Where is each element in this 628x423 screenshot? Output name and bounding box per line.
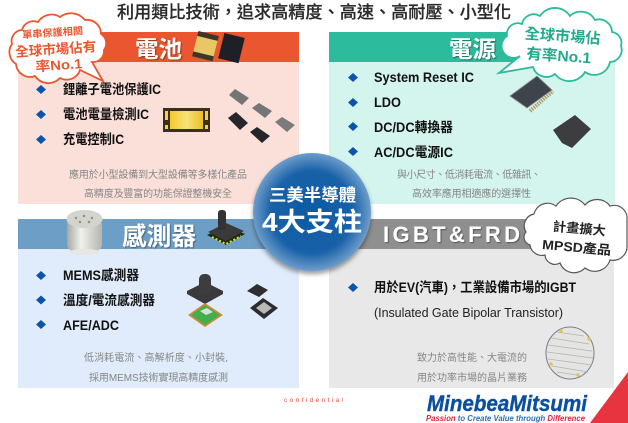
battery description	[69, 168, 247, 200]
callout text	[523, 25, 601, 68]
icon: yellow battery chip	[163, 108, 210, 132]
badge line 2: 4大支柱	[262, 207, 362, 237]
icon: pressure sensor exploded view	[187, 274, 223, 327]
sensor heading: 感測器	[122, 222, 196, 251]
battery header band	[18, 32, 299, 62]
callout text: 計畫擴大	[552, 219, 606, 238]
icon: SOP chip	[510, 76, 553, 111]
cloud shape	[499, 8, 622, 81]
battery bullet list: 充電控制IC	[63, 131, 124, 147]
IGBT description: 用於功率市場的晶片業務	[417, 371, 527, 384]
sensor bullet list: 溫度/電流感測器	[63, 292, 155, 308]
IGBT full name: (Insulated Gate Bipolar Transistor)	[374, 306, 563, 320]
logo wordmark: MinebeaMitsumi	[427, 391, 588, 416]
power bullet list: LDO	[374, 95, 401, 110]
battery description: 應用於小型設備到大型設備等多樣化產品	[69, 168, 247, 181]
logo tagline: Passion to Create Value through Difference	[426, 414, 586, 423]
icon: QFN chip	[553, 115, 591, 148]
battery bullet list	[36, 81, 161, 147]
callout text: 全球市場佔有	[15, 38, 97, 60]
IGBT bullet item: 用於EV(汽車)，工業設備市場的IGBT	[374, 279, 577, 295]
sensor header band	[18, 219, 299, 249]
power description	[397, 168, 541, 200]
icon: QFN sensor chip	[247, 284, 278, 319]
panel: IGBT and FRD	[329, 219, 614, 388]
icon: small package chips	[228, 89, 295, 143]
sensor description	[84, 351, 228, 384]
callout text: 全球市場佔	[524, 25, 601, 48]
power bullet list: AC/DC電源IC	[374, 145, 453, 160]
sensor panel body	[18, 219, 299, 388]
IGBT panel body	[329, 219, 614, 388]
cloud shape	[524, 198, 627, 273]
callout text: MPSD產品	[542, 237, 612, 258]
callout text: 有率No.1	[526, 45, 592, 67]
callout: power market share	[499, 8, 622, 81]
callout text	[14, 23, 98, 76]
panel: sensor	[18, 210, 299, 388]
panel: power	[329, 32, 615, 204]
battery bullet list: 電池電量檢測IC	[63, 106, 149, 122]
power bullet list: System Reset IC	[374, 70, 474, 85]
battery panel body	[18, 32, 299, 204]
panel: battery	[18, 31, 299, 204]
IGBT description: 致力於高性能、大電流的	[417, 351, 527, 364]
power bullet list	[348, 70, 474, 160]
badge line 1: 三美半導體	[269, 185, 356, 205]
callout: expand MPSD products	[524, 198, 627, 273]
sensor bullet list: AFE/ADC	[63, 318, 119, 333]
sensor bullet list: MEMS感測器	[63, 267, 139, 283]
callout text: 單串保護相關	[22, 24, 83, 41]
power panel body	[329, 32, 615, 204]
logo	[426, 391, 588, 423]
battery description: 高精度及豐富的功能保證整機安全	[84, 187, 232, 200]
callout text: 率No.1	[35, 55, 83, 74]
icon: header pressure sensor	[207, 210, 245, 245]
confidential mark: confidential	[284, 397, 344, 404]
corner triangle	[590, 372, 628, 423]
IGBT header band	[329, 219, 614, 249]
icon: metal sensor cylinder	[66, 210, 102, 255]
sensor description: 採用MEMS技術實現高精度感測	[89, 371, 228, 384]
sensor description: 低消耗電流、高解析度、小封裝,	[84, 351, 228, 364]
power description: 高效率應用相適應的選擇性	[412, 187, 531, 200]
battery heading: 電池	[135, 36, 182, 62]
callout: battery market share	[9, 13, 106, 83]
title: 利用類比技術，追求高精度、高速、高耐壓、小型化	[117, 3, 511, 22]
sensor bullet list	[36, 267, 155, 333]
power header band	[329, 32, 615, 62]
icon: header chips	[192, 31, 245, 63]
central badge	[253, 153, 371, 271]
badge circle	[253, 153, 371, 271]
cloud shape	[9, 13, 106, 83]
power bullet list: DC/DC轉換器	[374, 119, 453, 135]
callout text	[542, 218, 613, 258]
IGBT description	[417, 351, 527, 384]
icon: wafer	[546, 327, 594, 379]
power heading: 電源	[449, 36, 496, 62]
IGBT heading: IGBT&FRD	[383, 222, 520, 247]
power description: 與小尺寸、低消耗電流、低雜訊、	[397, 168, 541, 181]
battery bullet list: 鋰離子電池保護IC	[63, 81, 161, 97]
